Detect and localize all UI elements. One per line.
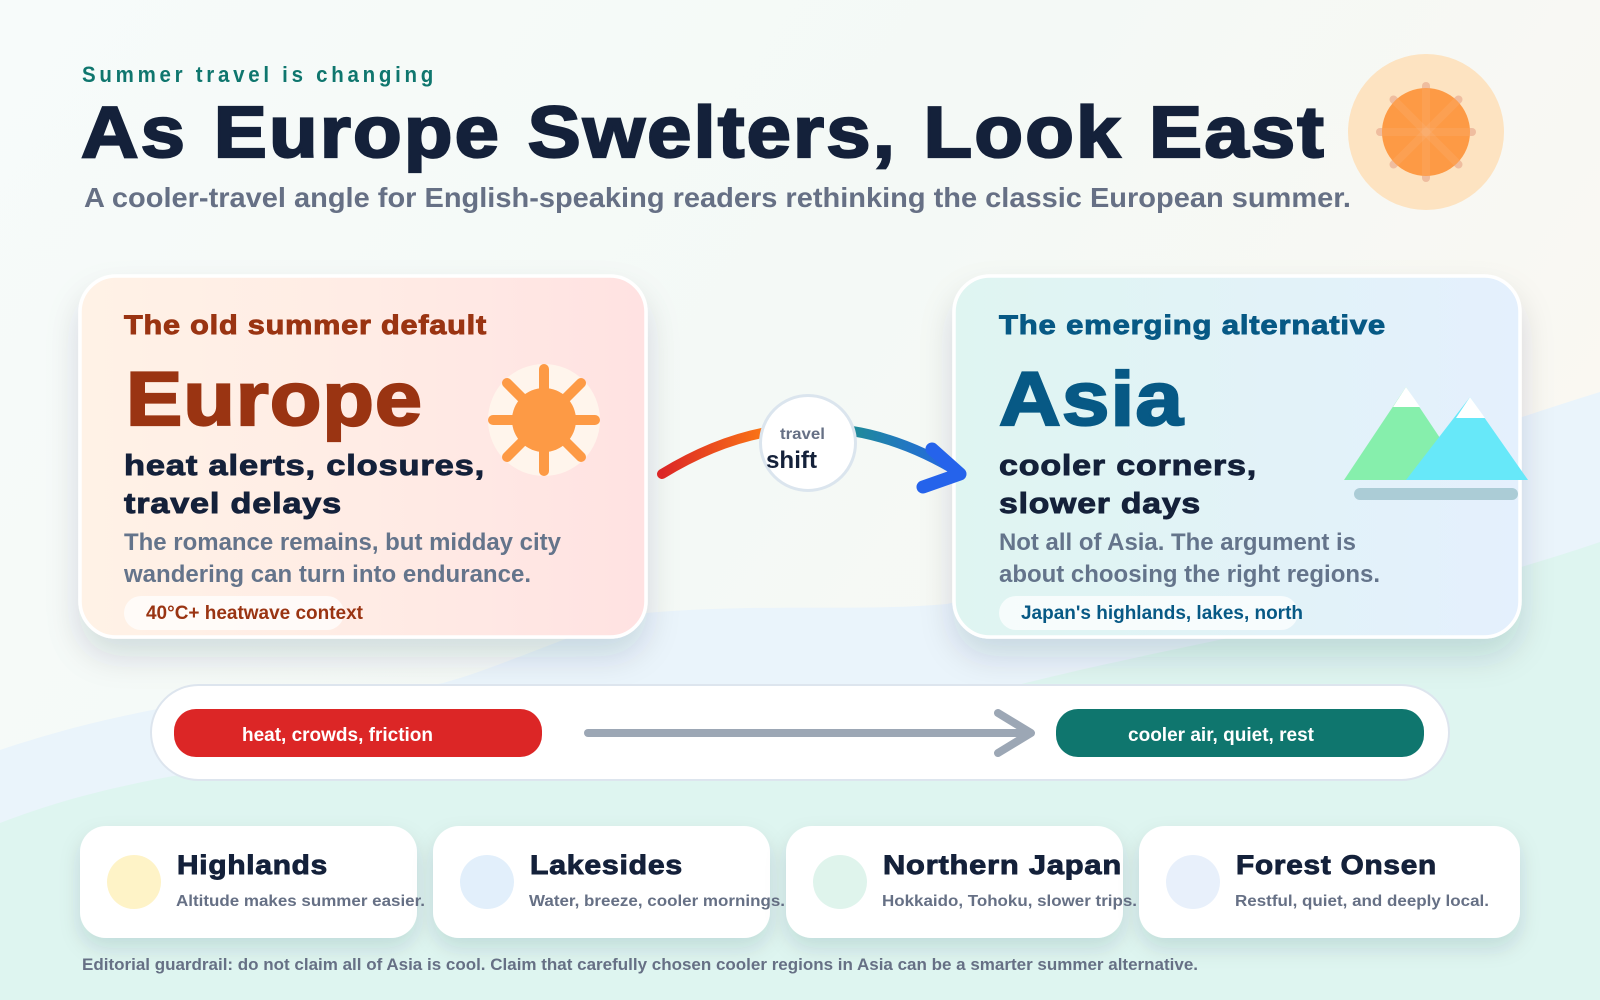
subheading: cooler corners: cooler corners, (999, 450, 1257, 482)
heading: old summer default: The old summer default (124, 310, 487, 340)
body text: Asia: about choosing the right regions. (999, 561, 1380, 588)
big label: Asia: Asia (999, 357, 1184, 442)
tag: Japan regions (999, 596, 1303, 630)
card text: Northern Japan: Hokkaido, Tohoku, slower trips. (882, 893, 1137, 910)
pill: cooler air, quiet, rest: cooler air, quiet, rest (1128, 725, 1315, 746)
card title: Northern Japan: Northern Japan (883, 850, 1122, 880)
eyebrow: Summer travel is changing (82, 62, 437, 87)
icon: blue dot (460, 855, 514, 909)
heading: emerging alternative: The emerging alternative (999, 310, 1386, 340)
card text: Forest Onsen: Restful, quiet, and deeply local. (1235, 893, 1489, 910)
title: As Europe Swelters, Look East (81, 93, 1326, 173)
card background: Europe (80, 276, 646, 637)
subheading: heat alerts (124, 450, 485, 520)
card background: Asia (954, 276, 1520, 637)
subheading: cooler corners: slower days (999, 488, 1201, 520)
tag: Japan regions: Japan's highlands, lakes, north (1021, 603, 1303, 624)
icon: green dot (813, 855, 867, 909)
pill: cooler air, quiet, rest (1056, 709, 1424, 757)
icon: yellow dot (107, 855, 161, 909)
panel: Europe (80, 276, 646, 637)
icon: lavender dot (1166, 855, 1220, 909)
card: Forest Onsen (1139, 826, 1520, 938)
card: Highlands (80, 826, 425, 938)
footnote: editorial guardrail: Editorial guardrail: do not claim all of Asia is cool. Claim that carefully chosen cooler regions in Asia can be a smarter summer alternative. (82, 955, 1198, 974)
card: Northern Japan (786, 826, 1137, 938)
pill: heat, crowds, friction (174, 709, 542, 757)
card title: Highlands: Highlands (177, 850, 328, 880)
arrow: pipeline (588, 713, 1031, 753)
body text: Europe: wandering can turn into endurance. (123, 561, 531, 588)
card title: Lakesides: Lakesides (530, 850, 683, 880)
icon: sun (488, 364, 600, 476)
tag: heatwave context: 40°C+ heatwave context (146, 603, 364, 624)
icon: header sun (1348, 54, 1504, 210)
subtitle: A cooler-travel angle for English-speaking readers rethinking the classic European summer. (84, 182, 1351, 213)
icon: mountains (1344, 387, 1528, 500)
subheading: cooler corners (999, 450, 1257, 520)
body text: Asia (999, 529, 1380, 588)
arrow: travel shift (662, 396, 960, 490)
card title: Forest Onsen: Forest Onsen (1236, 850, 1437, 880)
pill: heat, crowds, friction: heat, crowds, friction (242, 725, 433, 746)
big label: Europe: Europe (126, 357, 423, 442)
card: Lakesides (433, 826, 785, 938)
panel: Asia (954, 276, 1528, 637)
card text: Lakesides: Water, breeze, cooler mornings. (529, 893, 785, 910)
badge: travel shift: travel (780, 426, 825, 443)
card text: Highlands: Altitude makes summer easier. (176, 893, 425, 910)
tag: heatwave context (124, 596, 364, 630)
badge: travel shift: shift (766, 447, 817, 474)
body text: Europe (123, 529, 562, 588)
body text: Asia: Not all of Asia. The argument is (999, 529, 1356, 556)
body text: Europe: The romance remains, but midday city (124, 529, 562, 556)
pipeline bar (151, 685, 1449, 780)
badge: travel shift (760, 396, 856, 490)
subheading: heat alerts: heat alerts, closures, (124, 450, 485, 482)
subheading: heat alerts: travel delays (124, 488, 342, 520)
